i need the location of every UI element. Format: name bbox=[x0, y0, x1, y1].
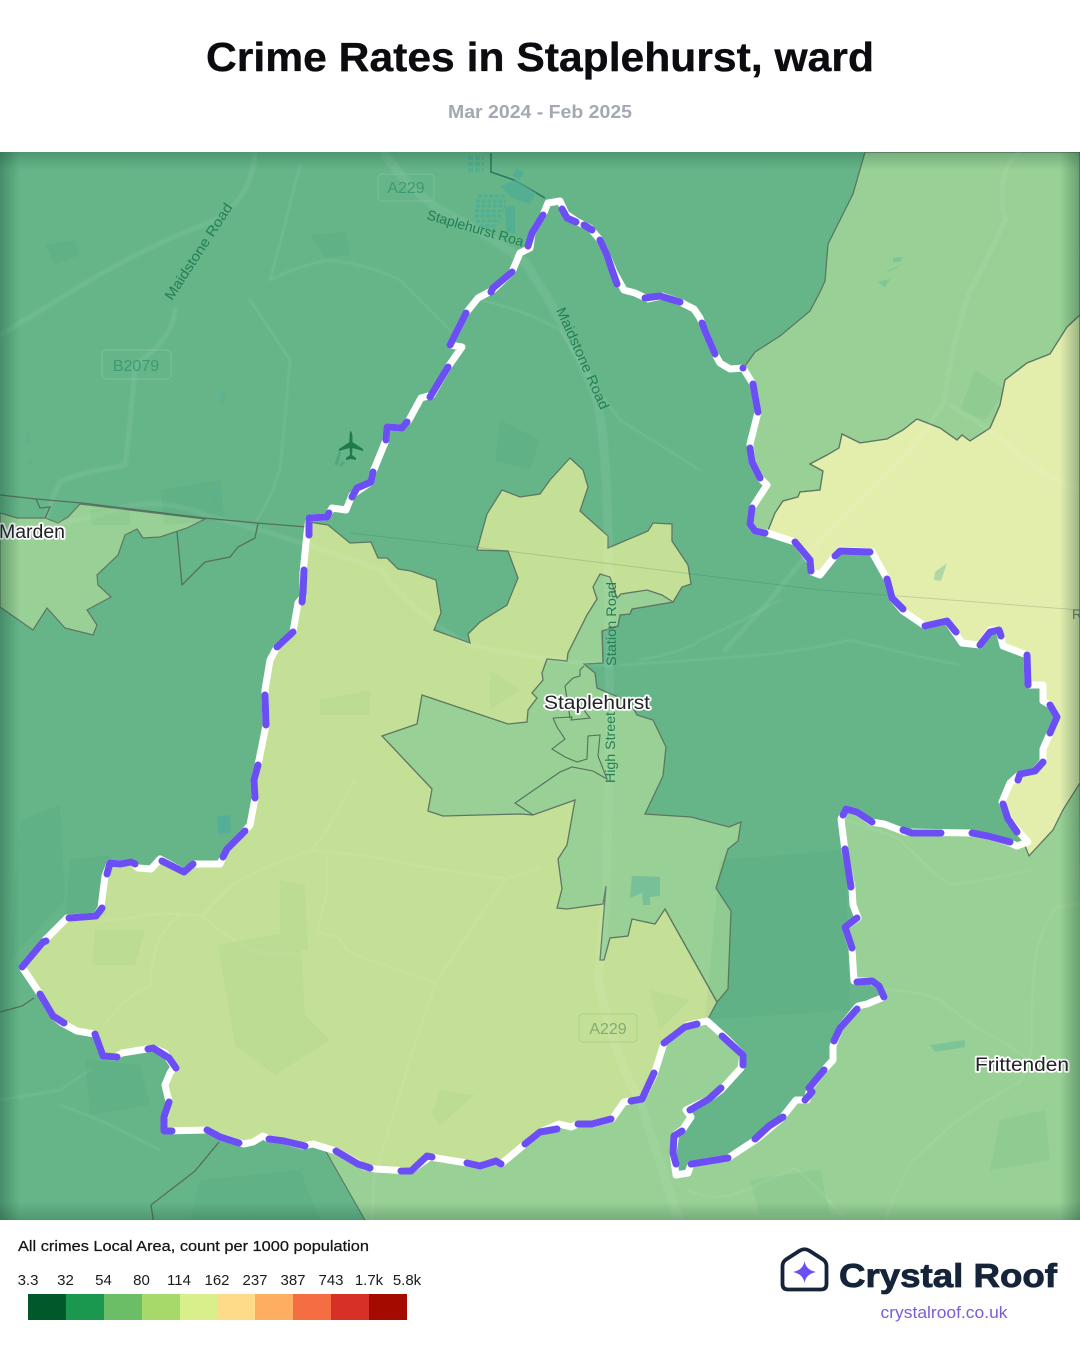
road label: A229 north bbox=[378, 174, 434, 201]
east-west railway line bbox=[350, 533, 1080, 610]
legend scale values: 32 bbox=[57, 1272, 74, 1289]
legend bbox=[18, 1238, 422, 1320]
area: north-east, mid green bbox=[745, 152, 1080, 533]
road label: A229 south: A229 bbox=[589, 1021, 627, 1038]
brand logo bbox=[782, 1249, 1058, 1322]
map detail: roads bbox=[4, 152, 1022, 1150]
legend scale values bbox=[18, 1272, 422, 1289]
icon: airport plane bbox=[336, 431, 363, 466]
title: Crime Rates in Staplehurst, ward bbox=[206, 34, 874, 80]
road label: Maidstone Road east: Maidstone Road bbox=[553, 305, 613, 412]
ward boundary: white line with purple dashes bbox=[22, 201, 1057, 1175]
legend scale values: 743 bbox=[318, 1272, 344, 1289]
legend scale values: 237 bbox=[242, 1272, 268, 1289]
legend title: All crimes Local Area, count per 1000 population bbox=[18, 1238, 369, 1255]
area: east, pale yellow-green bbox=[767, 315, 1080, 856]
boundary white base bbox=[22, 201, 1057, 1175]
road label: High Street: High Street bbox=[602, 712, 618, 783]
map detail: light-area patches bbox=[92, 670, 690, 1125]
map edge vignette bbox=[0, 152, 1080, 1220]
road label: A229 south bbox=[579, 1014, 637, 1042]
road label: Maidstone Road west: Maidstone Road bbox=[161, 200, 236, 303]
legend scale values: 5.8k bbox=[393, 1272, 422, 1289]
place label: Frittenden: Frittenden bbox=[975, 1055, 1069, 1076]
legend colour bar bbox=[28, 1294, 407, 1320]
area: central Staplehurst, mid green bbox=[382, 574, 741, 1002]
place label: Marden: Marden bbox=[0, 522, 65, 543]
icon: house with star bbox=[782, 1249, 826, 1290]
place label: Staplehurst: Staplehurst bbox=[544, 692, 651, 714]
road label: A229 north: A229 bbox=[387, 180, 425, 197]
subtitle: date range: Mar 2024 - Feb 2025 bbox=[448, 101, 632, 122]
road label: Station Road: Station Road bbox=[603, 582, 619, 666]
legend scale values: 80 bbox=[133, 1272, 150, 1289]
road label: B2079 bbox=[102, 350, 171, 379]
wordmark: Crystal Roof bbox=[839, 1257, 1058, 1294]
map detail: wooded patches bbox=[90, 372, 1049, 1204]
legend scale values: 3.3 bbox=[18, 1272, 38, 1289]
area: west of ward, light green bbox=[22, 458, 717, 1171]
legend scale values: 1.7k bbox=[355, 1272, 384, 1289]
legend scale values: 162 bbox=[204, 1272, 230, 1289]
boundary purple dashes bbox=[22, 209, 1057, 1171]
legend scale values: 114 bbox=[167, 1272, 191, 1289]
map detail: buildings and river at north edge bbox=[468, 153, 545, 234]
boundary lines between districts bbox=[0, 495, 307, 1225]
legend scale values: 387 bbox=[280, 1272, 306, 1289]
choropleth map bbox=[0, 152, 1080, 1225]
boundary lines inside central Staplehurst bbox=[515, 666, 607, 815]
map detail: ponds and water bbox=[217, 257, 965, 1052]
legend scale values: 54 bbox=[95, 1272, 112, 1289]
area: Marden, mid green bbox=[0, 504, 205, 635]
area: south and south-east, mid green bbox=[324, 783, 1080, 1222]
website: crystalroof.co.uk bbox=[880, 1304, 1008, 1322]
map base: dark green areas bbox=[0, 152, 1080, 1220]
road label: B2079: B2079 bbox=[113, 358, 159, 375]
road label: Staplehurst Road: Staplehurst Roa bbox=[425, 207, 526, 250]
